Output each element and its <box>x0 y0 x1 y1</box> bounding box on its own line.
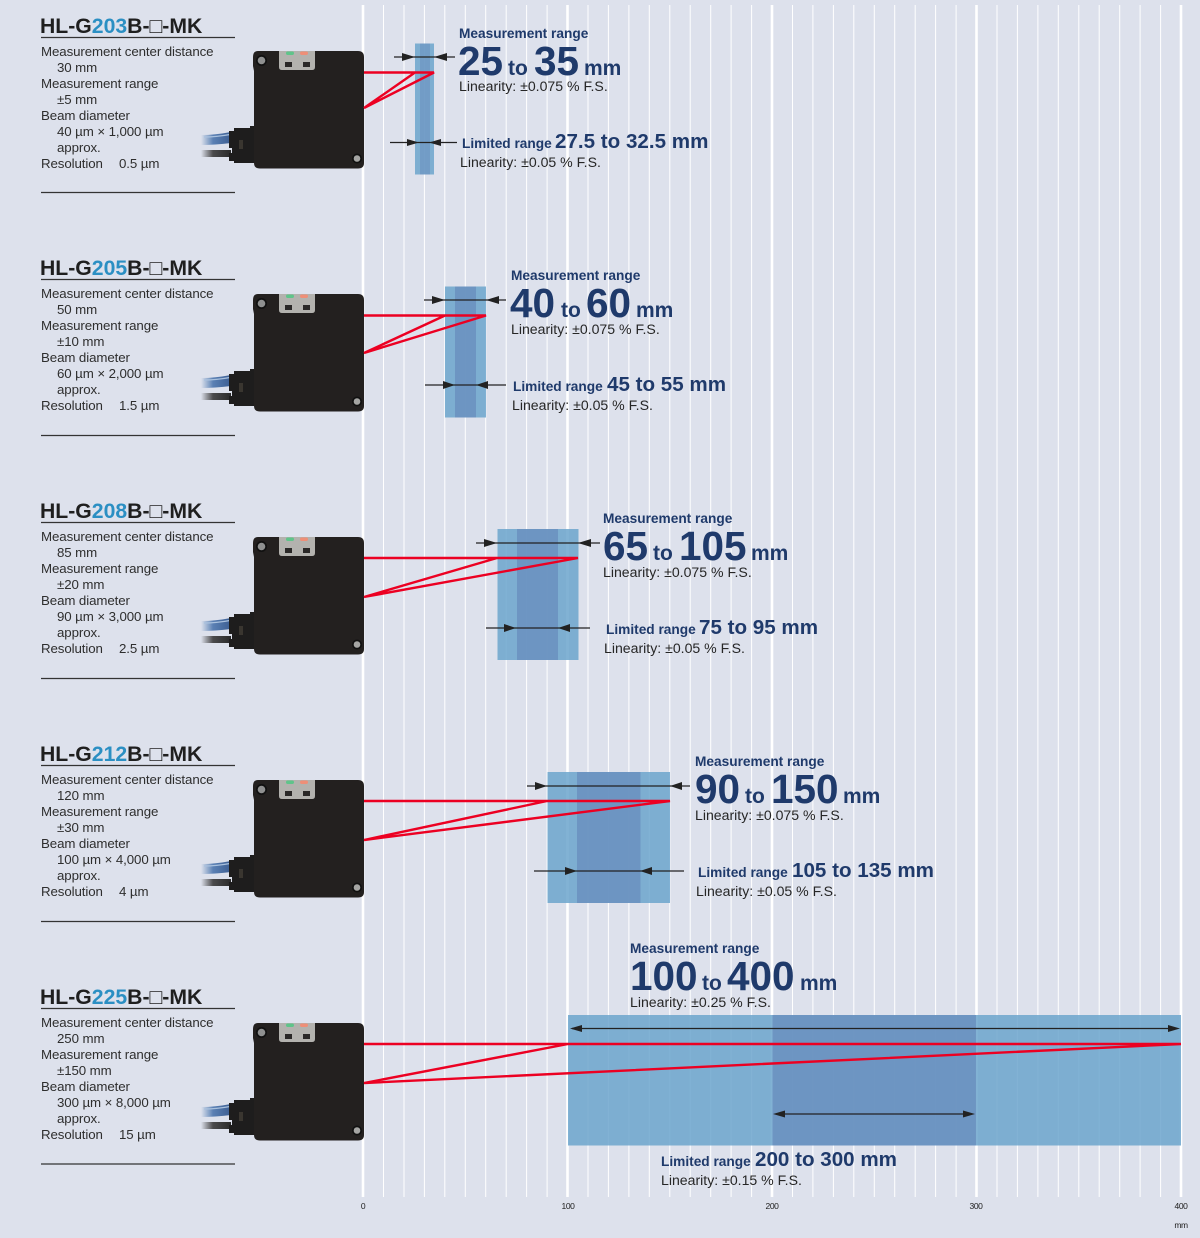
axis labels: 300 <box>970 1201 983 1211</box>
spec block: HL-G208B: approx. <box>57 625 101 640</box>
laser beam <box>364 801 670 840</box>
measurement range label: 40 <box>510 280 555 326</box>
icon: sensor <box>201 1023 364 1140</box>
spec block: HL-G225B: 15 µm <box>119 1127 156 1142</box>
spec block: HL-G205B: HL-G205B-□-MK <box>40 257 203 280</box>
spec block: HL-G205B: Measurement range <box>41 318 158 333</box>
spec block: HL-G212B: Beam diameter <box>41 836 131 851</box>
measurement range label: Linearity: ±0.25 % F.S. <box>630 994 771 1010</box>
spec block: HL-G205B: 1.5 µm <box>119 398 159 413</box>
laser beam <box>364 72 434 108</box>
limited range label: Linearity: ±0.05 % F.S. <box>604 640 745 656</box>
spec block: HL-G212B: Resolution <box>41 884 103 899</box>
spec block: HL-G208B: HL-G208B-□-MK <box>40 500 203 523</box>
spec block: HL-G208B: Measurement center distance <box>41 529 213 544</box>
measurement range label: mm <box>636 299 673 322</box>
spec block: HL-G203B: HL-G203B-□-MK <box>40 15 203 38</box>
measurement range label: to <box>702 972 722 995</box>
spec block: HL-G203B: 40 µm × 1,000 µm <box>57 124 164 139</box>
spec block: HL-G225B <box>40 986 235 1164</box>
measurement range label: 100 <box>630 953 698 999</box>
arrows <box>570 1025 1180 1118</box>
spec block: HL-G205B: ±10 mm <box>57 334 104 349</box>
spec block: HL-G205B <box>40 257 235 436</box>
spec block: HL-G203B: Measurement center distance <box>41 44 213 59</box>
limited range label: 75 to 95 mm <box>699 616 818 639</box>
spec block: HL-G205B: Beam diameter <box>41 350 131 365</box>
spec block: HL-G203B: ±5 mm <box>57 92 97 107</box>
axis labels <box>361 1201 1188 1230</box>
spec block: HL-G225B: Resolution <box>41 1127 103 1142</box>
limited range label <box>512 373 726 413</box>
spec block: HL-G212B: 100 µm × 4,000 µm <box>57 852 171 867</box>
measurement range label <box>458 26 621 94</box>
range band <box>498 529 578 660</box>
spec block: HL-G203B: 0.5 µm <box>119 156 159 171</box>
spec block: HL-G225B: 250 mm <box>57 1031 104 1046</box>
measurement range label: Measurement range <box>695 754 825 769</box>
spec block: HL-G212B: Measurement center distance <box>41 772 213 787</box>
laser beam <box>364 316 486 353</box>
limited range label <box>696 859 934 899</box>
spec block: HL-G208B: ±20 mm <box>57 577 104 592</box>
spec block: HL-G203B: Beam diameter <box>41 108 131 123</box>
measurement range label: Measurement range <box>630 941 760 956</box>
spec block: HL-G212B: HL-G212B-□-MK <box>40 743 203 766</box>
spec block: HL-G208B: 85 mm <box>57 545 97 560</box>
spec block: HL-G208B: 2.5 µm <box>119 641 159 656</box>
measurement range label: Linearity: ±0.075 % F.S. <box>603 564 752 580</box>
axis labels: 0 <box>361 1201 366 1211</box>
panel: HL-G208B <box>40 500 818 678</box>
axis labels: mm <box>1174 1220 1188 1230</box>
spec block: HL-G225B: Beam diameter <box>41 1079 131 1094</box>
measurement range label: mm <box>584 57 621 80</box>
spec block: HL-G212B: 120 mm <box>57 788 104 803</box>
measurement range label: 65 <box>603 523 648 569</box>
laser beam <box>364 1044 1181 1083</box>
measurement range label: Linearity: ±0.075 % F.S. <box>695 807 844 823</box>
measurement range label: Measurement range <box>459 26 589 41</box>
measurement range label: 400 <box>727 953 795 999</box>
limited range label: 105 to 135 mm <box>792 859 934 882</box>
measurement range label: mm <box>800 972 837 995</box>
spec block: HL-G208B: Beam diameter <box>41 593 131 608</box>
measurement range label: 60 <box>586 280 631 326</box>
limited range label: Limited range <box>698 865 788 880</box>
spec block: HL-G203B: Measurement range <box>41 76 158 91</box>
limited range label: 27.5 to 32.5 mm <box>555 130 708 153</box>
range band <box>548 772 670 903</box>
limited range label: 45 to 55 mm <box>607 373 726 396</box>
arrows <box>390 53 457 146</box>
arrows <box>424 296 506 389</box>
laser beam <box>364 558 578 597</box>
spec block: HL-G203B: approx. <box>57 140 101 155</box>
axis labels: 400 <box>1175 1201 1188 1211</box>
spec block: HL-G203B: 30 mm <box>57 60 97 75</box>
arrows <box>476 539 600 632</box>
spec block: HL-G225B: approx. <box>57 1111 101 1126</box>
axis labels: 100 <box>562 1201 575 1211</box>
measurement range label: Linearity: ±0.075 % F.S. <box>459 78 608 94</box>
limited range label <box>604 616 818 656</box>
measurement range label: to <box>653 542 673 565</box>
spec block: HL-G203B <box>40 15 235 192</box>
limited range label: Linearity: ±0.05 % F.S. <box>460 154 601 170</box>
limited range label: Linearity: ±0.15 % F.S. <box>661 1172 802 1188</box>
measurement range label: 25 <box>458 38 503 84</box>
spec block: HL-G212B: approx. <box>57 868 101 883</box>
measurement range label <box>630 941 837 1010</box>
spec block: HL-G208B: Measurement range <box>41 561 158 576</box>
limited range label: 200 to 300 mm <box>755 1148 897 1171</box>
panel: HL-G203B <box>40 15 708 192</box>
spec block: HL-G212B: Measurement range <box>41 804 158 819</box>
spec block: HL-G205B: approx. <box>57 382 101 397</box>
measurement range label: 150 <box>771 766 839 812</box>
panel: HL-G212B <box>40 743 934 922</box>
spec block: HL-G225B: HL-G225B-□-MK <box>40 986 203 1009</box>
limited range label <box>460 130 708 170</box>
panel: HL-G205B <box>40 257 726 436</box>
measurement range label: 35 <box>534 38 579 84</box>
measurement range label: Linearity: ±0.075 % F.S. <box>511 321 660 337</box>
spec block: HL-G205B: 60 µm × 2,000 µm <box>57 366 164 381</box>
spec block: HL-G225B: Measurement range <box>41 1047 158 1062</box>
spec block: HL-G203B: Resolution <box>41 156 103 171</box>
spec block: HL-G208B <box>40 500 235 678</box>
range band <box>445 286 486 418</box>
spec block: HL-G225B: Measurement center distance <box>41 1015 213 1030</box>
range band <box>415 44 434 174</box>
spec block: HL-G208B: Resolution <box>41 641 103 656</box>
scale grid <box>363 5 1181 1197</box>
limited range label: Limited range <box>606 622 696 637</box>
measurement range label <box>510 268 673 337</box>
limited range label: Linearity: ±0.05 % F.S. <box>512 397 653 413</box>
limited range label: Limited range <box>462 136 552 151</box>
limited range label: Linearity: ±0.05 % F.S. <box>696 883 837 899</box>
limited range label: Limited range <box>513 379 603 394</box>
measurement range label: 105 <box>679 523 747 569</box>
spec block: HL-G205B: Resolution <box>41 398 103 413</box>
icon: sensor <box>201 537 364 654</box>
panel: HL-G225B <box>40 941 1181 1188</box>
spec block: HL-G208B: 90 µm × 3,000 µm <box>57 609 164 624</box>
range band <box>568 1015 1181 1146</box>
spec block: HL-G212B <box>40 743 235 922</box>
icon: sensor <box>201 294 364 412</box>
arrows <box>527 782 690 875</box>
limited range label: Limited range <box>661 1154 751 1169</box>
spec block: HL-G205B: 50 mm <box>57 302 97 317</box>
measurement range label <box>603 511 788 580</box>
measurement range label: mm <box>843 785 880 808</box>
measurement range label: mm <box>751 542 788 565</box>
axis labels: 200 <box>766 1201 779 1211</box>
measurement range label <box>695 754 880 823</box>
spec block: HL-G212B: ±30 mm <box>57 820 104 835</box>
measurement range label: Measurement range <box>511 268 641 283</box>
measurement range label: to <box>561 299 581 322</box>
limited range label <box>661 1148 897 1188</box>
measurement range label: 90 <box>695 766 740 812</box>
icon: sensor <box>201 780 364 898</box>
measurement range label: to <box>508 57 528 80</box>
icon: sensor <box>201 51 364 168</box>
spec block: HL-G205B: Measurement center distance <box>41 286 213 301</box>
spec block: HL-G225B: 300 µm × 8,000 µm <box>57 1095 171 1110</box>
measurement range label: Measurement range <box>603 511 733 526</box>
spec block: HL-G225B: ±150 mm <box>57 1063 112 1078</box>
spec block: HL-G212B: 4 µm <box>119 884 148 899</box>
measurement range label: to <box>745 785 765 808</box>
